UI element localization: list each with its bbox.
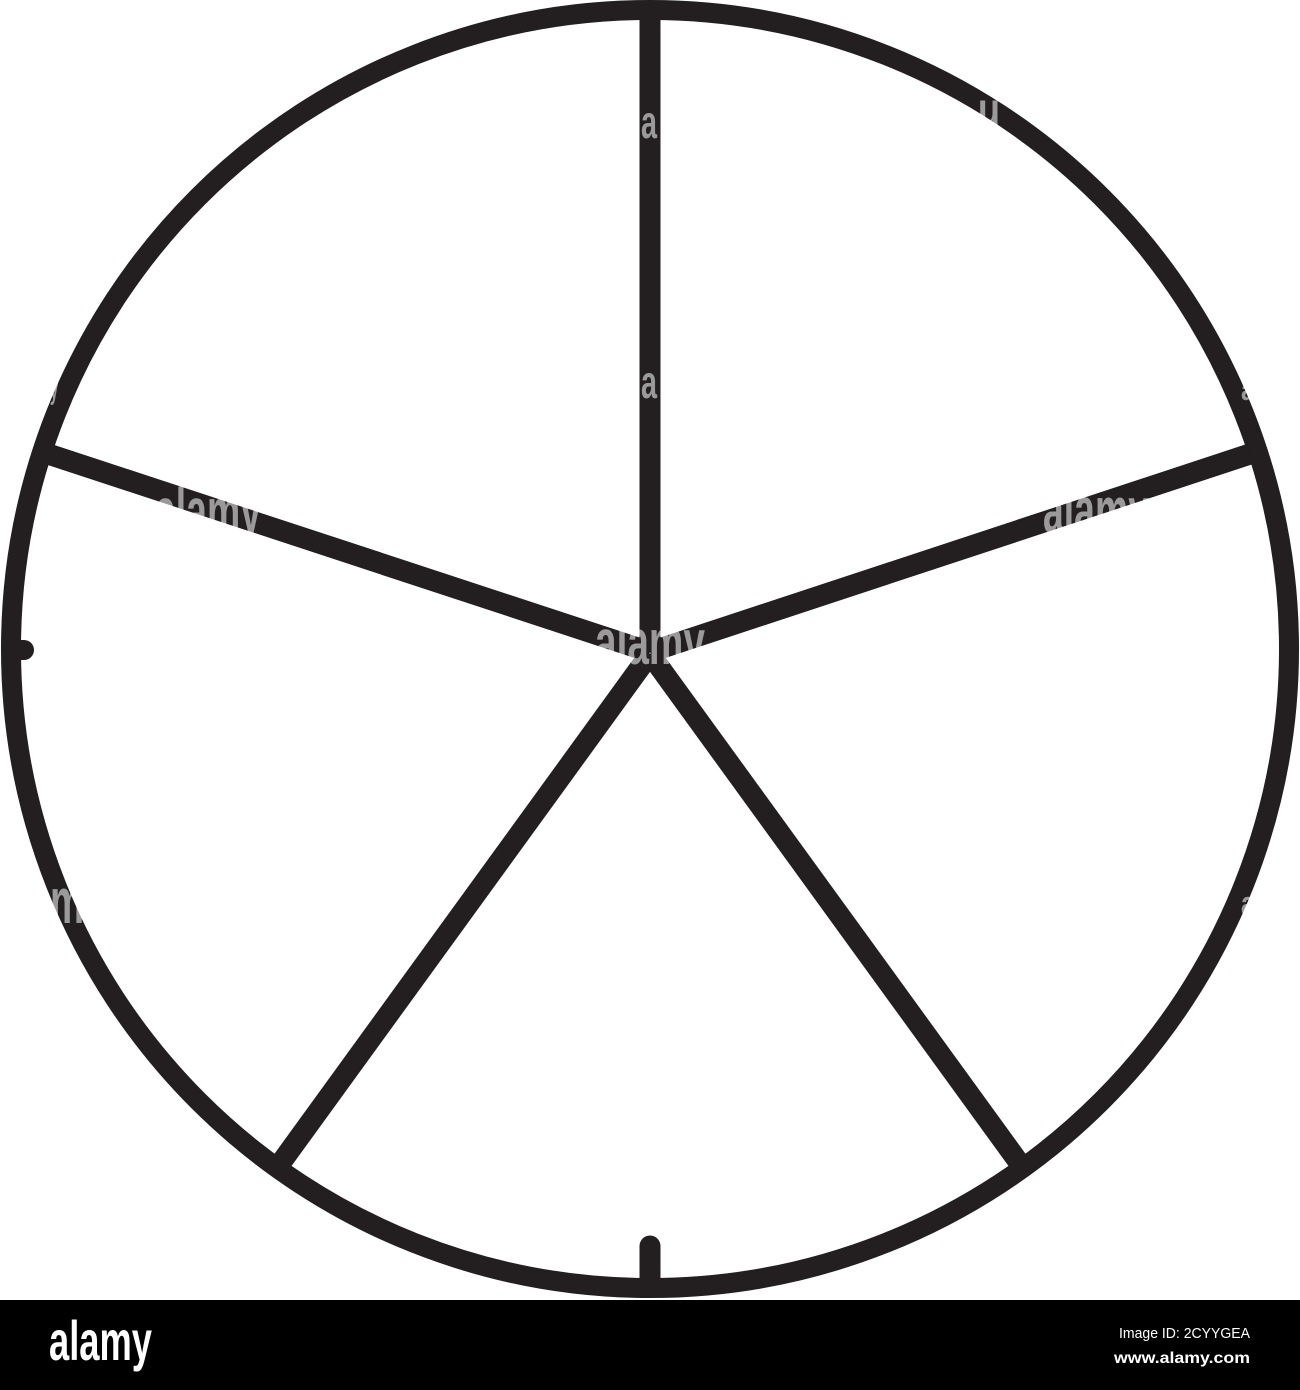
spoke: upper left (48, 454, 650, 652)
watermark: left spoke: alamy (155, 475, 261, 547)
watermark: upper right edge: a (1241, 374, 1255, 407)
watermark: lower left arc: m (50, 865, 84, 937)
spoke: top (640, 12, 660, 652)
watermark: top spoke upper: a (641, 96, 657, 148)
faint watermark fragments over the lines: y (50, 373, 58, 406)
faint watermark fragments over the lines (50, 83, 1256, 937)
spoke: lower right (650, 654, 1020, 1164)
tick: bottom (640, 1246, 660, 1286)
watermark: right spoke: alamy (1043, 474, 1149, 546)
footer background (0, 1300, 1300, 1390)
logo: alamy: alamy (49, 1309, 152, 1372)
watermark: lower right edge: a (1241, 885, 1256, 923)
spoke: lower left (280, 654, 650, 1164)
spoke: upper right (650, 454, 1250, 652)
tick: left (15, 640, 24, 660)
image id: Image ID: 2CYYGEA (1119, 1325, 1250, 1342)
footer bar (0, 1300, 1300, 1390)
watermark: upper right arc: u (978, 83, 1000, 135)
watermark: top spoke lower: a (641, 356, 657, 408)
website: www.alamy.com (1113, 1350, 1250, 1367)
watermark: centre: alamy (595, 606, 705, 678)
